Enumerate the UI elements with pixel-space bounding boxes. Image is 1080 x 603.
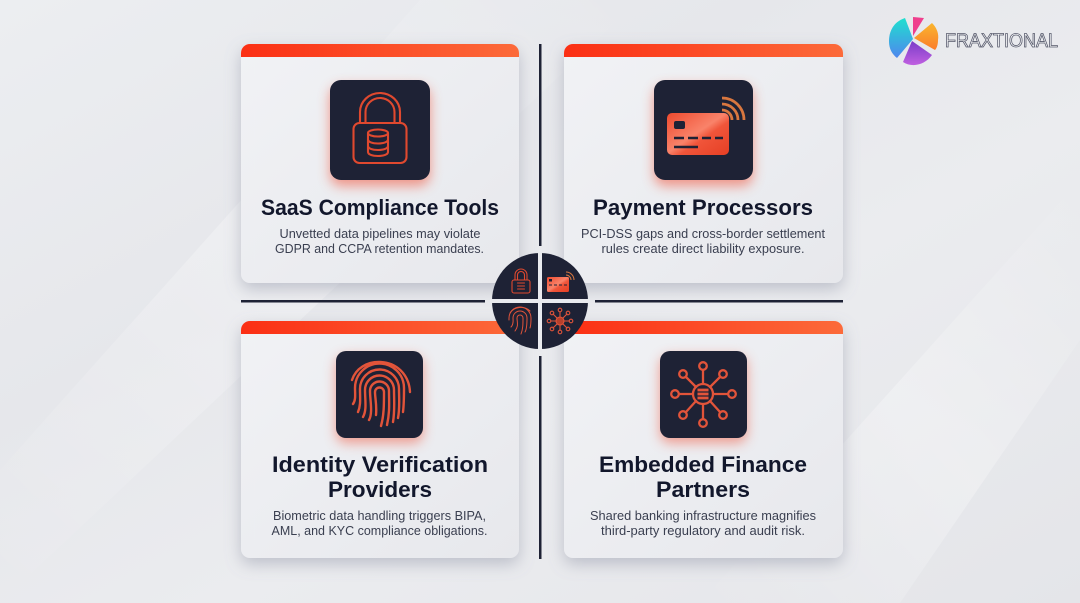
body text: Shared banking infrastructure magnifies [590,509,816,523]
icon: mini card [547,272,574,292]
body text [590,509,816,538]
logo: Fraxtional [889,17,1058,65]
panel: Embedded Finance Partners [564,321,843,558]
icon: network hub [660,351,747,443]
logo pie mark [889,17,938,65]
body text: third-party regulatory and audit risk. [601,524,805,538]
body text: GDPR and CCPA retention mandates. [275,242,484,256]
heading [599,452,807,502]
accent bar [241,44,519,57]
heading: Payment Processors [593,195,813,220]
panel: Identity Verification Providers [241,321,519,558]
accent bar [564,321,843,334]
icon: payment card [654,80,753,186]
quadrant divider lines [241,44,843,559]
central hub with four mini icons [490,250,590,352]
icon: padlock with database [330,80,430,186]
logo wordmark: FRAXTIONAL [945,31,1058,52]
icon: mini padlock [512,269,530,293]
heading [272,452,488,502]
body text: AML, and KYC compliance obligations. [272,524,488,538]
body text: Unvetted data pipelines may violate [280,227,481,241]
icon: mini fingerprint [509,307,531,334]
icon: mini network [547,308,573,334]
heading: Partners [656,477,750,502]
heading: Providers [328,477,432,502]
body text: rules create direct liability exposure. [602,242,804,256]
icon: fingerprint [336,351,423,443]
heading: Embedded Finance [599,452,807,477]
body text: PCI-DSS gaps and cross-border settlement [581,227,826,241]
heading: SaaS Compliance Tools [261,195,499,220]
body text [275,227,484,256]
heading: Identity Verification [272,452,488,477]
body text [581,227,826,256]
panel: SaaS Compliance Tools [241,44,519,283]
body text [272,509,488,538]
accent bar [241,321,519,334]
body text: Biometric data handling triggers BIPA, [273,509,486,523]
panel: Payment Processors [564,44,843,283]
accent bar [564,44,843,57]
